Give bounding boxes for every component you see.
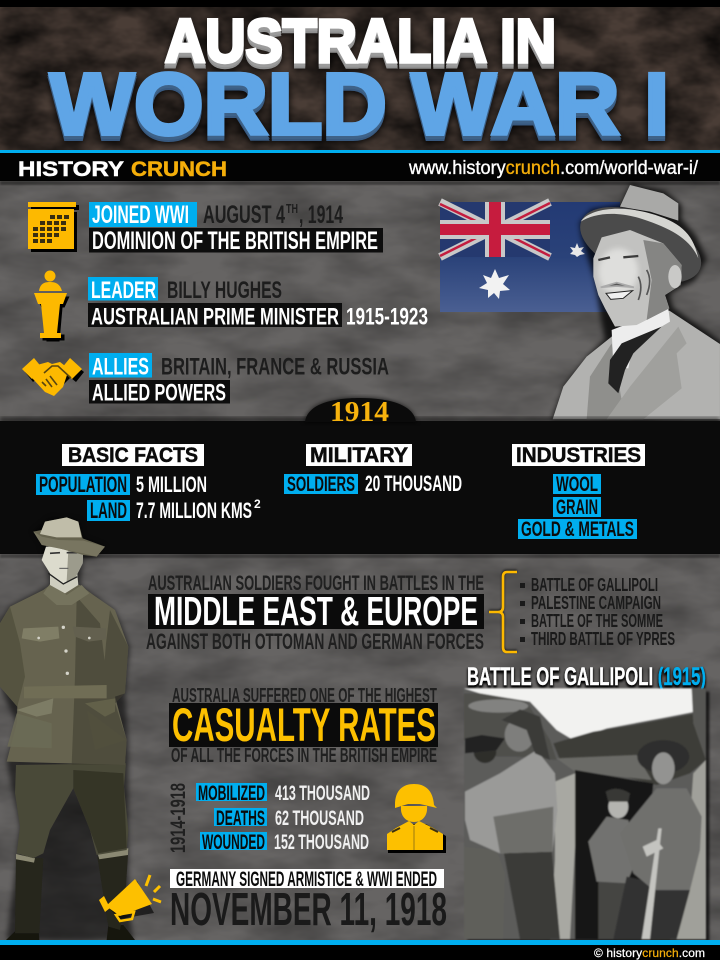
highlight: Middle East and Europe xyxy=(148,588,484,634)
middle man xyxy=(588,789,637,939)
icon: calendar xyxy=(28,202,79,252)
hat crown xyxy=(620,185,678,221)
right man xyxy=(613,740,702,939)
row: joined WWI: DOMINION OF THE BRITISH EMPIRE xyxy=(92,227,378,255)
text: British Empire forces: OF ALL THE FORCES IN THE BRITISH EMPIRE xyxy=(171,745,437,767)
bracket xyxy=(489,571,517,652)
jacket pockets and belt xyxy=(22,627,59,642)
title xyxy=(50,7,669,159)
photo: Battle of Gallipoli xyxy=(464,688,709,943)
armistice label xyxy=(170,868,444,891)
icon: handshake xyxy=(22,358,84,396)
row: mobilized: 413 THOUSAND xyxy=(275,782,370,805)
row: leader: 1915-1923 xyxy=(346,304,428,330)
column: military: SOLDIERS xyxy=(287,473,355,496)
year tab: 1914 xyxy=(330,397,389,428)
boots xyxy=(6,925,135,940)
column: basic facts: 2 xyxy=(254,497,261,511)
brand: History Crunch xyxy=(18,158,227,181)
row: leader xyxy=(88,277,428,330)
sandbags xyxy=(464,693,557,760)
title line: Australia in: AUSTRALIA IN xyxy=(165,10,556,78)
icon: podium xyxy=(34,270,70,342)
brand: History Crunch: HISTORY xyxy=(18,158,124,181)
row: allies xyxy=(89,353,389,406)
column: military: MILITARY xyxy=(310,444,408,467)
copyright: © historycrunch.com xyxy=(594,946,705,960)
portrait: Billy Hughes xyxy=(551,183,720,419)
armistice statement xyxy=(170,868,447,935)
title line: World War I: WORLD WAR I xyxy=(50,59,669,156)
text: against forces: AGAINST BOTH OTTOMAN AND GERMAN FORCES xyxy=(146,629,484,654)
highlight: Middle East and Europe: MIDDLE EAST & EUROPE xyxy=(154,588,478,634)
text: fought in battles: AUSTRALIAN SOLDIERS FOUGHT IN BATTLES IN THE xyxy=(148,572,484,595)
branches and trench roof xyxy=(553,713,706,785)
column: basic facts: BASIC FACTS xyxy=(68,444,198,467)
armistice date: NOVEMBER 11, 1918 xyxy=(170,883,447,935)
row: joined WWI: JOINED WWI xyxy=(92,201,189,229)
hat xyxy=(33,517,105,557)
neck and face xyxy=(50,567,78,593)
row: joined WWI: AUGUST 4 xyxy=(203,201,285,229)
jacket xyxy=(0,585,128,765)
row: leader: LEADER xyxy=(91,277,156,304)
column: industries xyxy=(512,444,645,541)
title line: World War I: WORLD WAR I xyxy=(50,56,669,153)
buttons xyxy=(37,626,91,675)
flag of Australia xyxy=(440,202,620,312)
footer xyxy=(0,940,720,960)
row: allies: BRITAIN, FRANCE & RUSSIA xyxy=(161,354,389,380)
casualty table xyxy=(167,782,370,854)
hat brim xyxy=(569,192,712,298)
Middle East and Europe statement xyxy=(146,572,484,654)
battle list xyxy=(520,575,675,649)
casualty rates statement xyxy=(169,685,438,767)
column: military xyxy=(284,444,462,496)
armistice label: GERMANY SIGNED ARMISTICE & WWI ENDED xyxy=(176,868,437,891)
row: leader: AUSTRALIAN PRIME MINISTER xyxy=(91,304,339,330)
column: industries: INDUSTRIES xyxy=(516,444,641,467)
trousers xyxy=(15,763,128,858)
brand: History Crunch: CRUNCH xyxy=(131,158,227,181)
row: deaths: DEATHS xyxy=(216,807,265,830)
dugout xyxy=(575,770,653,939)
left man xyxy=(465,709,560,939)
row: joined WWI xyxy=(89,201,383,255)
row: allies: ALLIES xyxy=(92,354,149,380)
row: deaths: 62 THOUSAND xyxy=(275,807,364,830)
title line: Australia in: AUSTRALIA IN xyxy=(165,7,556,75)
column: basic facts: POPULATION xyxy=(39,472,127,497)
column: basic facts: 5 MILLION xyxy=(136,472,207,497)
branding bar xyxy=(0,150,720,181)
portrait shadow xyxy=(551,183,720,419)
icon: megaphone xyxy=(99,875,161,921)
timeline band: 1914 xyxy=(0,397,720,558)
suit xyxy=(553,311,720,419)
column: military: 20 THOUSAND xyxy=(365,471,462,496)
row: deaths xyxy=(214,807,364,830)
row: joined WWI: , 1914 xyxy=(299,201,343,229)
column: basic facts: 7.7 MILLION KMS xyxy=(136,498,252,523)
row: joined WWI: TH xyxy=(286,201,298,216)
title line: World War I: WORLD WAR I xyxy=(50,62,669,159)
highlight: casualty rates: CASUALTY RATES xyxy=(172,698,436,751)
icon: soldier in helmet xyxy=(387,784,446,853)
row: wounded xyxy=(200,831,369,854)
leggings xyxy=(15,850,128,933)
year tab xyxy=(304,397,417,428)
row: mobilized: MOBILIZED xyxy=(198,782,265,805)
column: basic facts xyxy=(36,444,261,523)
column: industries: GRAIN xyxy=(556,496,598,519)
soldier shadow xyxy=(0,518,133,940)
column: industries: GOLD & METALS xyxy=(521,518,634,541)
header banner xyxy=(0,0,720,151)
sky xyxy=(464,688,695,740)
row: leader: BILLY HUGHES xyxy=(167,277,282,304)
row: allies: ALLIED POWERS xyxy=(92,380,226,406)
ground and walls xyxy=(464,847,505,939)
large star xyxy=(479,269,510,299)
column: industries: WOOL xyxy=(556,473,598,496)
small star xyxy=(570,243,585,257)
year label: 1914-1918 xyxy=(167,783,190,853)
website address: www.historycrunch.com/world-war-i/ xyxy=(408,158,699,179)
row: mobilized xyxy=(196,782,370,805)
title line: Australia in: AUSTRALIA IN xyxy=(165,12,556,80)
text: highest rates: AUSTRALIA SUFFERED ONE OF THE HIGHEST xyxy=(172,685,437,707)
face xyxy=(593,230,682,327)
fact rows xyxy=(22,201,428,406)
column: basic facts: LAND xyxy=(90,498,127,523)
collar and tie xyxy=(612,308,670,368)
row: wounded: WOUNDED xyxy=(202,831,265,854)
title line: Australia in: AUSTRALIA IN xyxy=(165,12,556,80)
soldier photo xyxy=(0,517,135,940)
title line: World War I: WORLD WAR I xyxy=(50,61,669,158)
highlight: casualty rates xyxy=(169,698,438,751)
collar xyxy=(43,584,89,605)
row: wounded: 152 THOUSAND xyxy=(274,831,369,854)
Union Jack canton xyxy=(440,202,550,257)
